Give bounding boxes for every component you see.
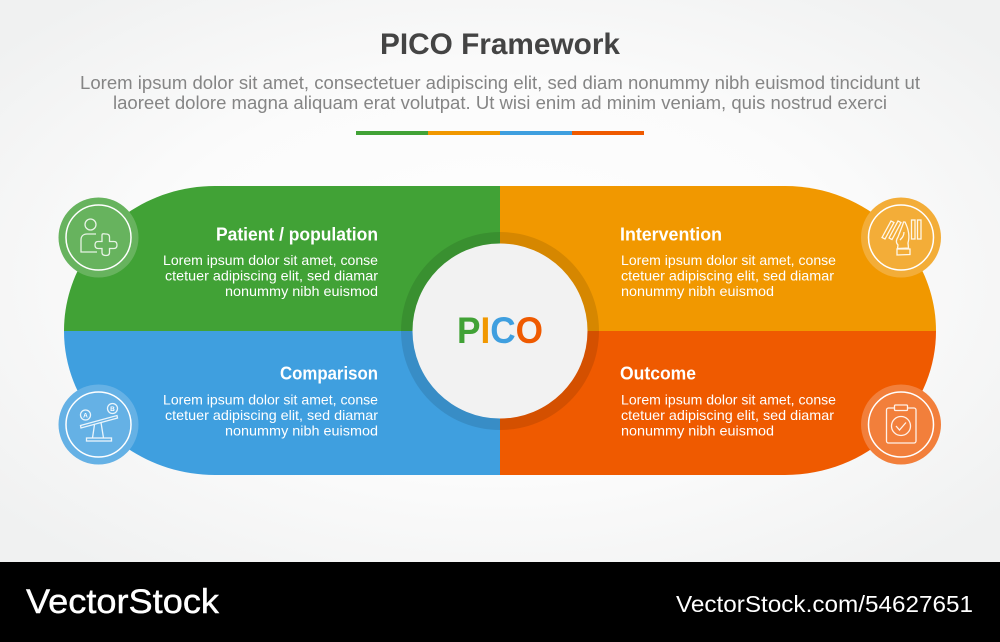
- icon: seesaw A/B comparison: [58, 384, 138, 464]
- icon: seesaw A/B comparison: B: [110, 406, 115, 413]
- text block: intervention: ctetuer adipiscing elit, sed diamar: [621, 268, 834, 284]
- text block: patient / population: [163, 224, 378, 299]
- watermark footer band: VectorStock.com/54627651: [676, 591, 973, 617]
- subtitle text: Lorem ipsum dolor sit amet, consectetuer adipiscing elit, sed diam nonummy nibh euismod tincidunt ut: [80, 72, 920, 93]
- text block: comparison: [163, 364, 378, 438]
- text block: intervention: nonummy nibh euismod: [621, 283, 774, 299]
- subtitle text: laoreet dolore magna aliquam erat volutpat. Ut wisi enim ad minim veniam, quis nostrud exerci: [113, 92, 887, 113]
- text block: outcome: Lorem ipsum dolor sit amet, conse: [621, 392, 836, 408]
- text block: outcome: nonummy nibh euismod: [621, 422, 774, 438]
- colored divider bar: [356, 131, 644, 135]
- center circle: [412, 244, 588, 418]
- subtitle text: [80, 72, 920, 113]
- text block: intervention: Lorem ipsum dolor sit amet, conse: [621, 252, 836, 268]
- text block: comparison: Lorem ipsum dolor sit amet, conse: [163, 392, 378, 408]
- text block: patient / population: Patient / population: [216, 224, 378, 244]
- text block: outcome: Outcome: [620, 364, 696, 384]
- text block: outcome: ctetuer adipiscing elit, sed diamar: [621, 407, 834, 423]
- center label PICO: PICO: [457, 310, 543, 351]
- icon: clipboard with check: [861, 384, 941, 464]
- text block: patient / population: ctetuer adipiscing elit, sed diamar: [165, 268, 378, 284]
- panel: outcome: [500, 331, 936, 475]
- text block: comparison: Comparison: [280, 364, 378, 384]
- center ring: [401, 232, 599, 430]
- panel: patient / population: [64, 186, 500, 331]
- icon: patient with plus: [58, 198, 138, 278]
- title: PICO Framework: [380, 28, 620, 61]
- text block: intervention: Intervention: [620, 224, 722, 244]
- text block: comparison: ctetuer adipiscing elit, sed diamar: [165, 407, 378, 423]
- icon: hand with bars: [861, 198, 941, 278]
- text block: outcome: [620, 364, 836, 438]
- text block: patient / population: nonummy nibh euismod: [225, 283, 378, 299]
- panel: intervention: [500, 186, 936, 331]
- watermark footer band: [0, 562, 1000, 642]
- text block: comparison: nonummy nibh euismod: [225, 422, 378, 438]
- panel: comparison: [64, 331, 500, 475]
- text block: intervention: [620, 224, 836, 299]
- icon: seesaw A/B comparison: A: [83, 412, 88, 420]
- text block: patient / population: Lorem ipsum dolor sit amet, conse: [163, 252, 378, 268]
- watermark footer band: VectorStock: [26, 583, 220, 621]
